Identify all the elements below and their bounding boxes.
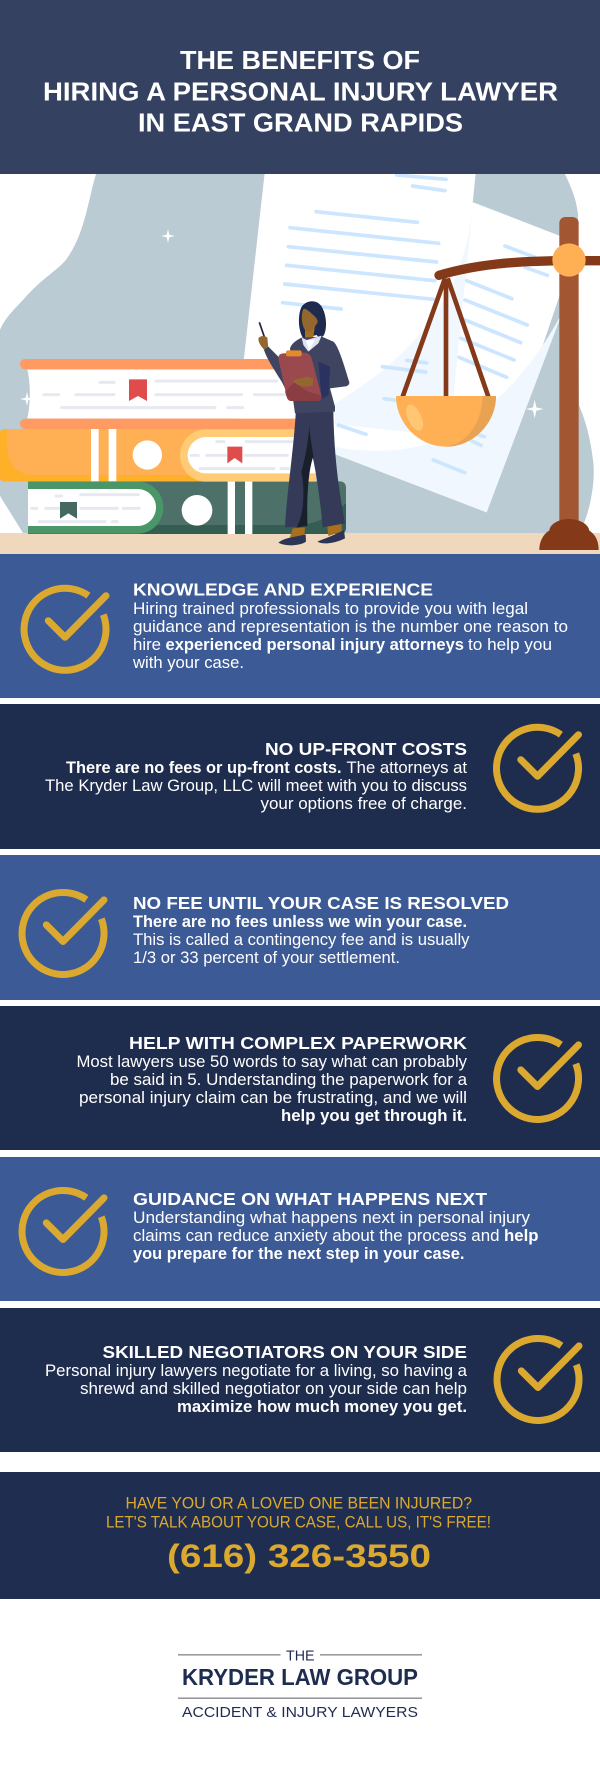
sparkle: upper left [161,229,175,243]
scales: bowl highlight [403,402,427,433]
sparkle: right [526,400,543,418]
lawyer: clipboard [278,353,322,401]
lawyer figure [258,301,349,545]
scales: pivot knob [552,243,586,277]
body text: guidance and representation is the number one reason to [133,618,568,636]
document: page shadow lower [333,310,563,512]
book stack [0,359,346,534]
lawyer: jacket shade [318,362,330,399]
body text: Most lawyers use 50 words to say what can probably [76,1053,468,1071]
body text [45,1362,468,1416]
scales: strings [403,278,488,397]
panel: no up-front costs [0,704,600,849]
document: back page [307,202,577,512]
panel: guidance [0,1157,600,1301]
heading: HELP WITH COMPLEX PAPERWORK [129,1033,467,1053]
book: green bottom [28,481,346,534]
sparkle: left [20,392,34,406]
lawyer: legs and shoes [278,410,345,545]
icon: check circle [497,1338,579,1420]
icon: check circle [24,588,106,670]
icon: check circle [497,727,579,809]
document: text lines [283,175,547,473]
body text: claims can reduce anxiety about the process and [133,1227,500,1245]
panel: skilled negotiators [0,1308,600,1452]
title [43,47,558,138]
body text: experienced personal injury attorneys [166,636,464,654]
panel: knowledge and experience [0,554,600,698]
lawyer: raised hand [258,336,268,350]
scales of justice [396,217,600,550]
lawyer: jacket [290,337,349,413]
lawyer: neck [305,325,315,343]
panel: complex paperwork [0,1006,600,1150]
scales: post [559,217,579,534]
icon: check circle [22,1190,104,1272]
body text [133,913,470,967]
scales: bowl [396,396,496,447]
lawyer: lower hand [293,377,313,387]
body text [76,1053,468,1125]
body text: The Kryder Law Group, LLC will meet with you to discuss [45,777,467,795]
heading: GUIDANCE ON WHAT HAPPENS NEXT [133,1189,487,1209]
logo: The Kryder Law Group: ACCIDENT & INJURY LAWYERS [182,1704,418,1721]
document: front page [237,170,476,447]
logo: The Kryder Law Group [178,1648,422,1721]
body text [45,759,467,813]
title: THE BENEFITS OF [180,47,420,75]
lawyer: trouser shade [297,425,313,527]
book: orange middle [0,429,316,482]
heading: NO FEE UNTIL YOUR CASE IS RESOLVED [133,893,509,913]
lawyer: pen [259,322,266,342]
scales: bowl shade [446,396,496,447]
body text: maximize how much money you get. [177,1398,467,1416]
body text [132,600,568,672]
lawyer: trousers [285,410,345,527]
lawyer: collar [302,336,322,352]
body text: your options free of charge. [260,795,467,813]
body text: Hiring trained professionals to provide you with legal [133,600,528,618]
header banner [0,0,600,174]
call to action text [106,1494,491,1532]
scales: base [539,519,599,550]
body text: to help you [468,636,552,654]
heading: NO UP-FRONT COSTS [265,739,467,759]
lawyer: hair [299,301,326,338]
icon: check circle [22,892,104,974]
lawyer: face [302,309,318,332]
phone number: (616) 326-3550 [167,1537,431,1574]
body text: There are no fees or up-front costs. [66,759,342,777]
lawyer: clipboard shade [285,382,322,401]
lawyer: blouse [306,340,315,350]
body text: This is called a contingency fee and is usually [133,931,470,949]
logo: The Kryder Law Group: KRYDER LAW GROUP [182,1664,418,1690]
body text: be said in 5. Understanding the paperwork for a [110,1071,468,1089]
background blob [0,174,594,533]
call to action text: LET'S TALK ABOUT YOUR CASE, CALL US, IT'S FREE! [106,1512,491,1532]
logo: The Kryder Law Group: THE [286,1648,314,1664]
body text: The attorneys at [346,759,467,777]
body text: with your case. [132,654,244,672]
body text: help you get through it. [281,1107,467,1125]
body text [133,1209,538,1263]
scales: beam [439,261,600,275]
body text: Personal injury lawyers negotiate for a living, so having a [45,1362,468,1380]
lawyer: raised arm [264,347,292,392]
body text: help [504,1227,538,1245]
title: IN EAST GRAND RAPIDS [138,110,463,138]
lawyer: upper body [258,301,349,413]
body text: you prepare for the next step in your case. [133,1245,464,1263]
book: white top [20,359,300,429]
call to action [0,1472,600,1599]
illustration: books, lawyer and scales [0,170,600,554]
lawyer: clipboard clip [286,350,302,356]
body text: There are no fees unless we win your case. [133,913,467,931]
body text: hire [133,636,161,654]
lawyer: ankles [290,523,342,537]
lawyer: shoes [278,530,345,545]
document: page shadow upper [335,202,473,433]
panel: no fee until resolved [0,855,600,1000]
body text: Understanding what happens next in personal injury [133,1209,531,1227]
body text: 1/3 or 33 percent of your settlement. [133,949,400,967]
title: HIRING A PERSONAL INJURY LAWYER [43,78,558,106]
heading: SKILLED NEGOTIATORS ON YOUR SIDE [102,1342,467,1362]
floor [0,533,600,554]
body text: shrewd and skilled negotiator on your side can help [80,1380,467,1398]
documents [237,170,577,512]
heading: KNOWLEDGE AND EXPERIENCE [133,580,433,600]
icon: check circle [497,1037,579,1119]
call to action text: HAVE YOU OR A LOVED ONE BEEN INJURED? [126,1494,472,1512]
body text: personal injury claim can be frustrating, and we will [79,1089,467,1107]
